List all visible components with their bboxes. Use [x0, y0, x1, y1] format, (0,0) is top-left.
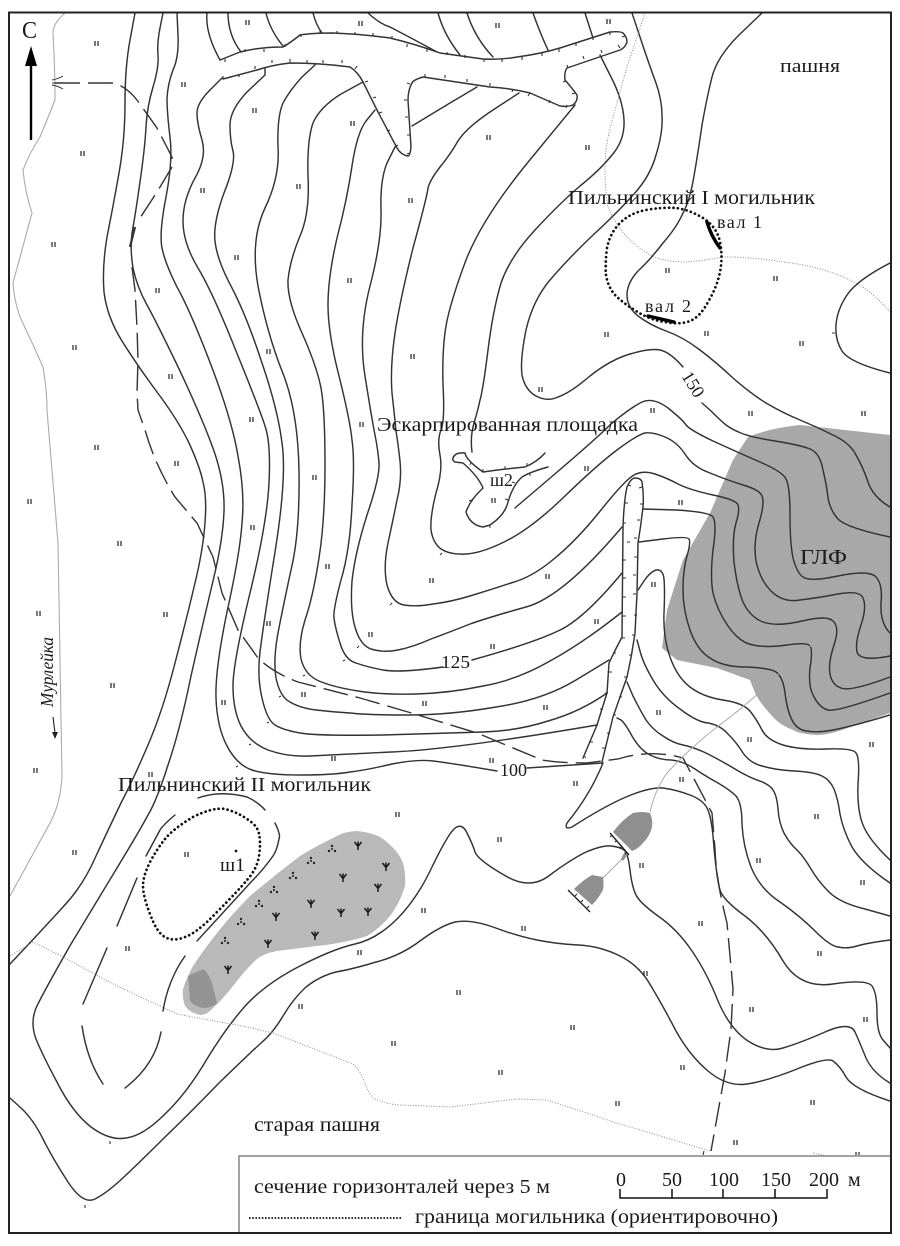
river Мурлейка	[10, 13, 65, 896]
scale bar: 100	[709, 1169, 739, 1191]
legend: boundary caption: граница могильника (ориентировочно)	[415, 1206, 778, 1228]
escarped platform outline	[453, 453, 548, 528]
scale bar: 200	[809, 1169, 839, 1191]
excavation trench 1	[610, 812, 652, 861]
label: escarped platform: Эскарпированная площадка	[377, 414, 638, 436]
scale bar: м	[848, 1169, 861, 1191]
north arrow: С	[22, 18, 37, 44]
legend: dotted boundary sample	[249, 1217, 402, 1219]
dashed road	[55, 83, 733, 1151]
label: rampart 1: вал 1	[717, 212, 762, 232]
label: cemetery I: Пильнинский I могильник	[568, 187, 815, 209]
label: ГЛФ zone: ГЛФ	[800, 545, 847, 569]
icons: trees in burial zone	[224, 842, 390, 974]
boundary: Пильнинский I cemetery	[606, 208, 722, 323]
legend: contour interval: сечение горизонталей через 5 м	[254, 1176, 550, 1198]
label: cemetery II: Пильнинский II могильник	[118, 774, 371, 796]
icons: bush dots in burial zone	[221, 845, 336, 944]
label: contour 125: 125	[441, 652, 470, 672]
river label and flow arrow: Мурлейка	[37, 637, 57, 708]
small contour ticks	[85, 333, 835, 1208]
label: contour 150: 150	[678, 368, 709, 401]
river label and flow arrow	[37, 637, 58, 739]
label: contour 100: 100	[500, 760, 527, 780]
gully with hachures at the top of the map	[220, 30, 627, 156]
rampart 2	[648, 316, 674, 322]
area: light grey burial zone	[183, 831, 405, 1015]
label: trench 2: ш2	[490, 470, 513, 490]
area: ГЛФ grey zone	[662, 425, 890, 735]
boundary: Пильнинский II cemetery	[143, 809, 260, 940]
thin grey tracks	[603, 633, 825, 878]
excavation trench 2	[568, 875, 604, 912]
label: rampart 2: вал 2	[645, 296, 691, 316]
label: old ploughland: старая пашня	[254, 1114, 380, 1136]
icon: bridge over the river	[52, 76, 63, 89]
scale bar: 50	[662, 1169, 682, 1191]
north arrow	[22, 18, 37, 140]
rampart 1	[707, 222, 720, 248]
legend panel	[239, 1156, 891, 1233]
scale bar: 0	[616, 1169, 626, 1191]
area: dark patch in burial zone	[188, 969, 217, 1008]
scale bar	[616, 1169, 861, 1198]
scale bar: 150	[761, 1169, 791, 1191]
ravine with hachures	[583, 478, 643, 762]
label: trench 1: ш1	[220, 855, 245, 876]
label: ploughland: пашня	[780, 56, 840, 77]
